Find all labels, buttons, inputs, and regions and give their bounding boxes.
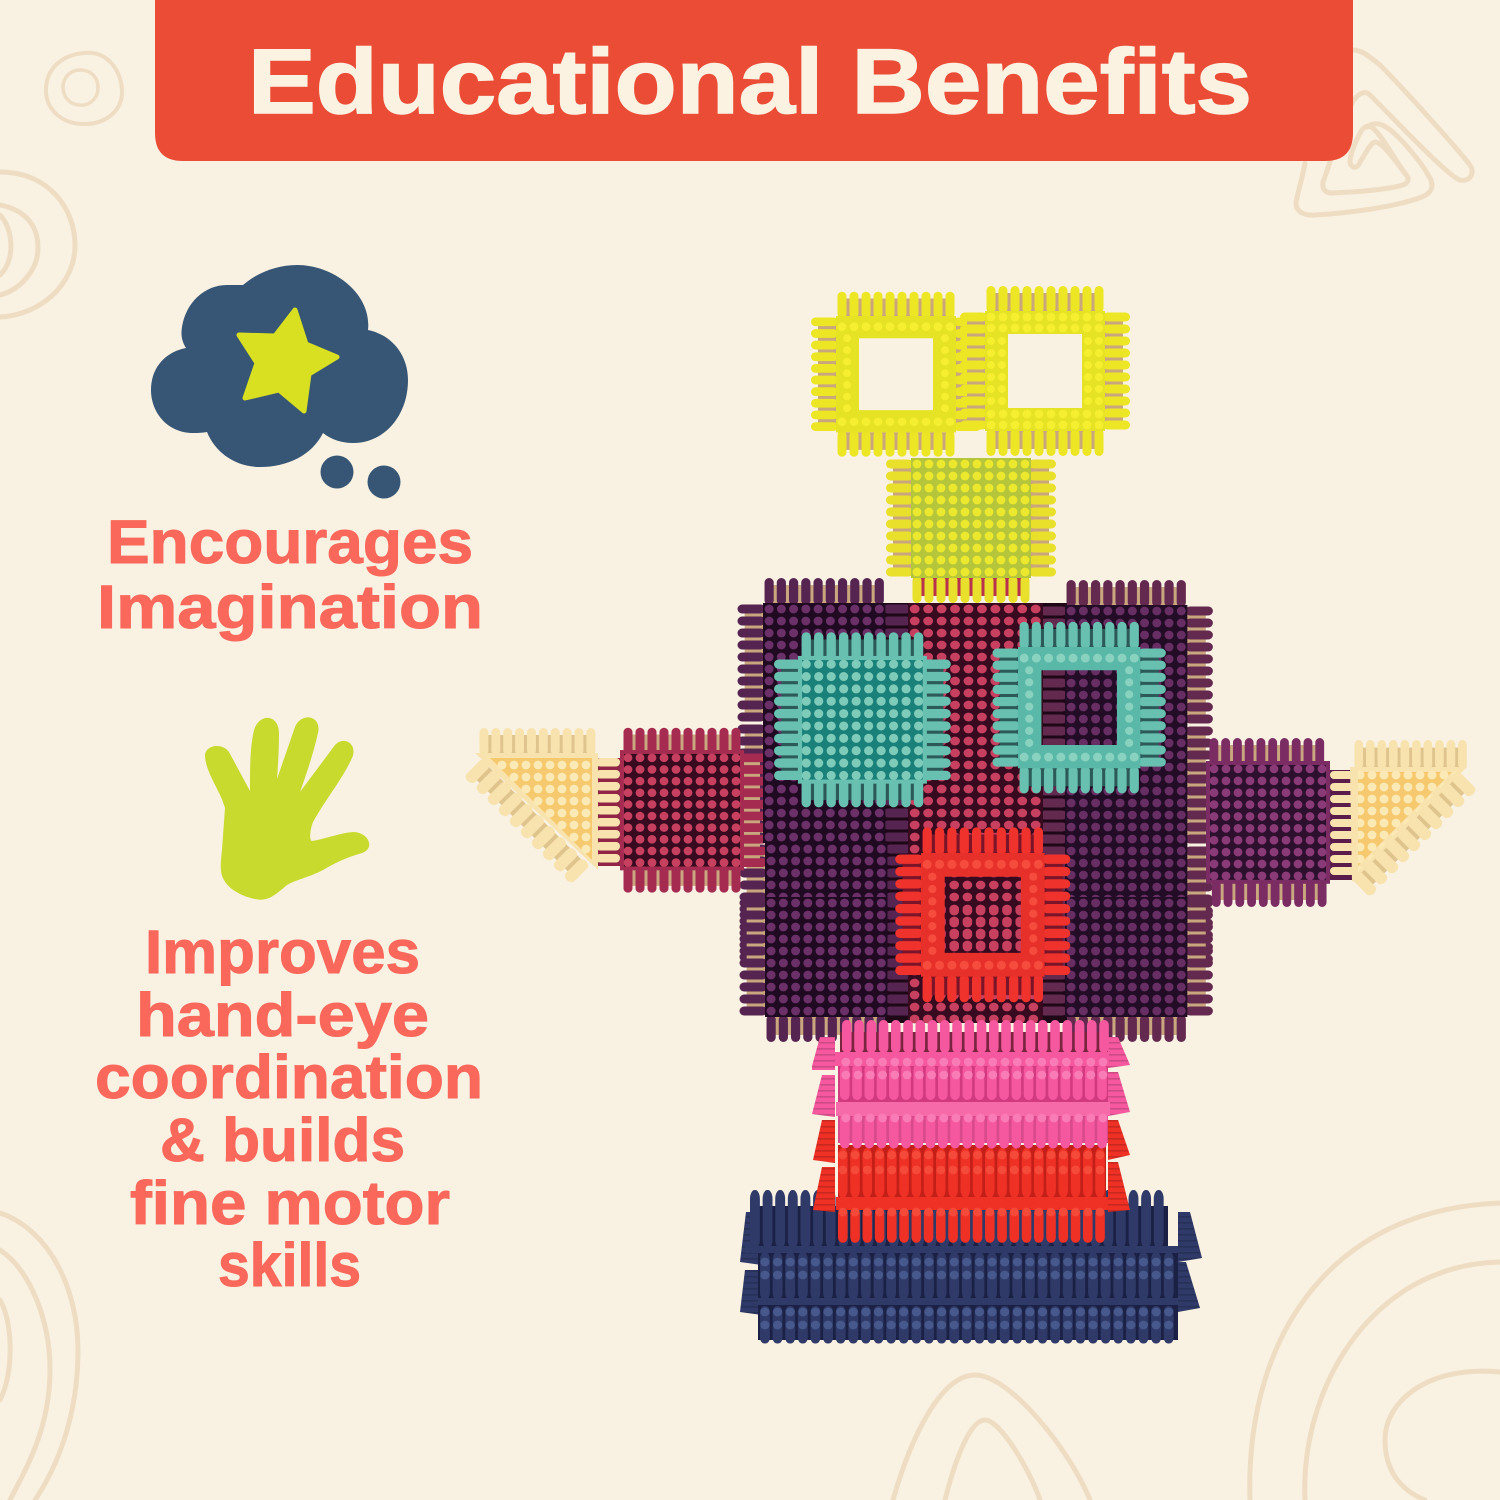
text: improves hand-eye coordination: coordination xyxy=(95,1043,483,1111)
text: improves hand-eye coordination xyxy=(95,918,483,1299)
purple body bristles xyxy=(738,578,1213,1042)
icon: thought cloud with star xyxy=(151,265,408,498)
right purple body plate xyxy=(1065,605,1187,1017)
text: improves hand-eye coordination: fine motor xyxy=(130,1169,450,1237)
navy base stack xyxy=(740,1190,1202,1344)
left arm maroon block xyxy=(622,728,767,893)
center maroon body block xyxy=(908,603,1043,1023)
text: encourages imagination: Encourages xyxy=(107,508,473,576)
right arm plum block xyxy=(1208,738,1328,907)
text: encourages imagination: Imagination xyxy=(97,573,483,641)
heading: Educational Benefits xyxy=(248,31,1252,133)
body center background with inner bristles xyxy=(883,603,1067,1023)
text: improves hand-eye coordination: Improves xyxy=(145,918,420,986)
teal frame eye block xyxy=(992,622,1166,793)
right arm cream triangle xyxy=(1330,740,1477,897)
icon: hand xyxy=(205,717,369,900)
yellow-green neck block xyxy=(886,458,1056,603)
text: encourages imagination xyxy=(97,508,483,641)
yellow right glasses frame xyxy=(960,286,1130,456)
left arm cream triangle xyxy=(464,728,620,884)
left purple body plate xyxy=(763,603,887,1017)
yellow left glasses frame xyxy=(811,292,981,457)
bristle block robot xyxy=(464,286,1477,1344)
text: improves hand-eye coordination: & builds xyxy=(160,1106,405,1174)
text: improves hand-eye coordination: skills xyxy=(218,1231,361,1299)
teal solid eye block xyxy=(774,632,951,807)
pink stack xyxy=(812,1020,1130,1148)
title banner xyxy=(155,0,1353,161)
text: improves hand-eye coordination: hand-eye xyxy=(136,981,429,1049)
red stack xyxy=(813,1120,1130,1243)
red frame mouth block xyxy=(895,827,1070,1002)
